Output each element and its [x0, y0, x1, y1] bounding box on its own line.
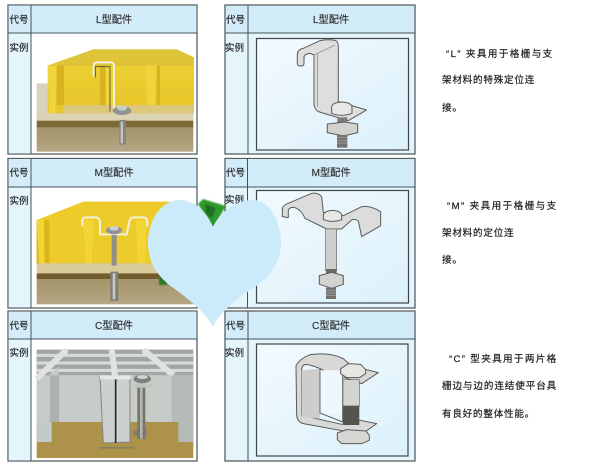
- heading: C photo code: 代号: [10, 321, 29, 332]
- heading: L drawing code: 代号: [226, 15, 245, 26]
- label: M photo example: 实例: [10, 195, 29, 207]
- heading: M photo title: M型配件: [94, 166, 134, 179]
- panel: M photo table: [8, 158, 197, 308]
- heading: L photo code: 代号: [10, 15, 29, 26]
- text block: C description: [442, 353, 557, 420]
- text block: L description: 架材料的特殊定位连: [442, 74, 535, 86]
- panel: C photo table: [8, 311, 197, 461]
- heading: C photo title: C型配件: [95, 319, 133, 332]
- label: L drawing example: 实例: [225, 42, 244, 54]
- heading: C drawing code: 代号: [226, 321, 245, 332]
- text block: L description: 接。: [442, 102, 463, 114]
- text block: M description: 架材料的定位连: [442, 227, 514, 239]
- heading: L drawing title: L型配件: [313, 13, 349, 26]
- icon: green fragment behind heart: [159, 199, 226, 285]
- text block: L description: “L” 夹具用于格栅与支: [446, 48, 553, 60]
- panel: L photo table: [8, 5, 197, 154]
- text block: C description: 有良好的整体性能。: [442, 408, 535, 420]
- label: L photo example: 实例: [10, 42, 29, 54]
- text block: C description: “C” 型夹具用于两片格: [449, 353, 557, 365]
- label: M drawing example: 实例: [225, 194, 244, 206]
- heading: M photo code: 代号: [10, 168, 29, 179]
- photo: grey grating with C clip: [37, 350, 193, 458]
- text block: M description: 接。: [442, 254, 463, 266]
- photo: yellow grating with M clip: [37, 202, 193, 304]
- text block: L description: [442, 48, 553, 114]
- heading: M drawing code: 代号: [226, 168, 245, 179]
- panel: L drawing table: [225, 5, 415, 154]
- label: C drawing example: 实例: [225, 347, 244, 359]
- photo: yellow grating with L clip: [37, 49, 194, 152]
- text block: C description: 栅边与边的连结使平台具: [442, 380, 557, 392]
- panel: M drawing table: [225, 158, 415, 308]
- text block: M description: “M” 夹具用于格栅与支: [447, 200, 557, 212]
- panel: C drawing table: [225, 311, 415, 461]
- heading: L photo title: L型配件: [96, 13, 132, 26]
- drawing: C clip: [256, 344, 408, 456]
- drawing: M clip: [256, 190, 408, 303]
- drawing: L clip: [256, 38, 408, 150]
- icon: light blue heart: [148, 200, 281, 327]
- heading: C drawing title: C型配件: [312, 319, 350, 332]
- heading: M drawing title: M型配件: [311, 166, 351, 179]
- text block: M description: [442, 200, 557, 266]
- label: C photo example: 实例: [10, 347, 29, 359]
